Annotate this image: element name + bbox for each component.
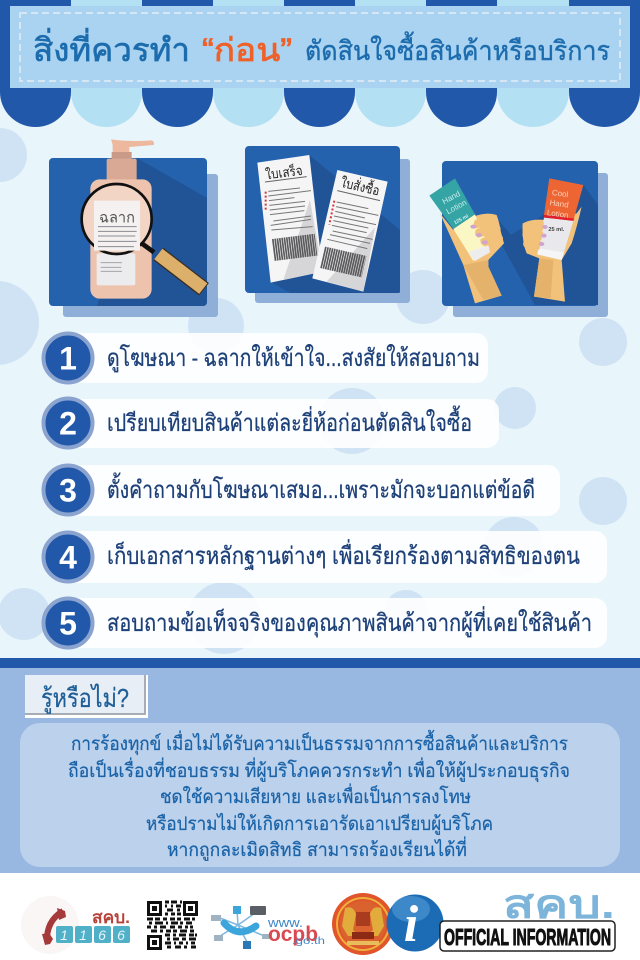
icon: left hand with tube: Hand [441, 189, 462, 206]
panel: did you know [0, 658, 640, 873]
item 4 [44, 531, 607, 583]
logo: hotline 1166 [21, 896, 130, 954]
title banner [10, 6, 630, 88]
text block: explanation [20, 723, 620, 867]
logo: ocpb website: www. [267, 915, 303, 930]
number badge 1: 1 [59, 340, 77, 376]
logo: hotline 1166: 1 [60, 927, 68, 943]
logo: hotline 1166: 6 [98, 927, 106, 943]
icon: receipt left: ใบเสร็จ [264, 161, 303, 182]
logo: ocpb website: ocpb [268, 923, 318, 946]
icon: right hand with tube [522, 178, 583, 302]
item 2 text: เปรียบเทียบสินค้าแต่ละยี่ห้อก่อนตัดสินใจซื้อ [107, 405, 472, 437]
text block: explanation: หากถูกละเมิดสิทธิ สามารถร้องเรียนได้ที่ [167, 836, 467, 861]
icon: right hand with tube: Hand [549, 198, 569, 210]
logo: ocpb website: .go.th [292, 936, 325, 947]
panel: compare products [429, 161, 608, 317]
icon: magnifying glass: ฉลาก [99, 209, 135, 226]
item 2 [44, 398, 499, 448]
panel: label check [49, 139, 218, 317]
logo: ocpb website [211, 906, 325, 949]
item 1 text: ดูโฆษณา - ฉลากให้เข้าใจ...สงสัยให้สอบถาม [107, 344, 480, 373]
heading: did you know: รู้หรือไม่? [41, 683, 129, 714]
icon: information i: i [404, 896, 419, 953]
item 1 [44, 333, 488, 383]
icon: right hand with tube: 25 ml. [548, 227, 565, 233]
text block: explanation: หรือปรามไม่ให้เกิดการเอารัดเอาเปรียบผู้บริโภค [146, 812, 493, 835]
title text: สิ่งที่ควรทำ [33, 28, 190, 68]
number badge 4 [44, 532, 92, 582]
logo: seal [332, 893, 394, 955]
icon: receipt right: ใบสั่งซื้อ [339, 173, 381, 198]
number badge 2 [44, 398, 92, 448]
icon: information i [386, 894, 444, 953]
logo: official information [440, 883, 615, 951]
icon: lotion bottle [82, 139, 204, 299]
icon: receipt right [312, 170, 388, 292]
title emphasis: “ก่อน” [202, 32, 292, 68]
icon: left hand with tube: 125 ml [453, 213, 470, 226]
heading: did you know [25, 675, 148, 718]
logo: hotline 1166: 6 [117, 927, 125, 943]
text block: explanation: การร้องทุกข์ เมื่อไม่ได้รับความเป็นธรรมจากการซื้อสินค้าและบริการ [71, 730, 568, 756]
item 3 text: ตั้งคำถามกับโฆษณาเสมอ...เพราะมักจะบอกแต่ข้อดี [107, 472, 535, 504]
number badge 4: 4 [59, 540, 77, 576]
QR code [147, 901, 198, 950]
icon: left hand with tube [429, 178, 504, 303]
item 3 [44, 465, 560, 516]
number badge 2: 2 [59, 406, 77, 442]
footer [0, 873, 640, 960]
logo: hotline 1166: 1 [79, 927, 87, 943]
text block: explanation: ชดใช้ความเสียหาย และเพื่อเป็นการลงโทษ [160, 783, 471, 808]
icon: left hand with tube: Lotion [445, 198, 468, 216]
logo: hotline 1166: สคบ. [92, 908, 130, 927]
title remainder: ตัดสินใจซื้อสินค้าหรือบริการ [305, 31, 610, 66]
number badge 3 [44, 466, 92, 514]
icon: magnifying glass [82, 184, 204, 289]
number badge 5 [44, 598, 92, 648]
text block: explanation: ถือเป็นเรื่องที่ชอบธรรม ที่ผู้บริโภคควรกระทำ เพื่อให้ผู้ประกอบธุรกิจ [68, 757, 570, 783]
logo: official information: สคบ. [503, 883, 615, 927]
number badge 1 [44, 334, 92, 382]
number badge 3: 3 [59, 472, 77, 508]
panel: receipts [245, 146, 410, 303]
item 5 [44, 598, 607, 648]
number badge 5: 5 [59, 606, 77, 642]
icon: receipt left [257, 155, 323, 283]
icon: right hand with tube: Lotion [546, 208, 569, 220]
awning [0, 0, 640, 127]
icon: right hand with tube: Cool [551, 188, 569, 199]
